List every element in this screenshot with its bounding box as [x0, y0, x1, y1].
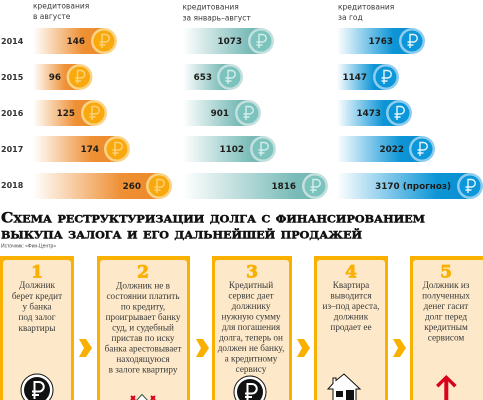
icon: rouble coin [234, 376, 266, 400]
icon: house [328, 374, 360, 400]
year labels: 2015 [1, 73, 24, 82]
panel: step 4: 4 [345, 262, 357, 282]
title [1, 210, 425, 242]
panel: step 1: квартиры [19, 323, 55, 333]
icon: red up arrow [436, 375, 457, 400]
panel: step 2: 2 [137, 262, 149, 282]
source note: Источник: «Фин-Центр» [1, 244, 56, 250]
panel: step 5: кредитным [424, 322, 468, 332]
bar: Jan-Aug 2015: 653 [194, 73, 212, 83]
bar: year 2017 [337, 136, 435, 162]
bar: year 2014: 1763 [369, 37, 393, 47]
bar: Jan-Aug 2014: 1073 [218, 37, 242, 47]
panel: step 1: под залог [19, 312, 56, 322]
panel: step 2: Должник не в [116, 280, 171, 290]
bar: year 2018 forecast: 3170 (прогноз) [375, 182, 451, 192]
arrow: step 2 to 3 [196, 339, 209, 357]
bar: year 2017: 2022 [380, 145, 404, 155]
column heading: yearly lending [338, 2, 394, 22]
panel: step 3: для погашения [222, 322, 281, 332]
panel: step 1: у банка [23, 302, 51, 312]
panel: step 5: полученных [422, 290, 470, 300]
bar: Jan-Aug 2016: 901 [211, 109, 229, 119]
bar: August 2014: 146 [67, 37, 85, 47]
panel: step 4: из–под ареста, [323, 301, 379, 311]
bar: August 2017: 174 [81, 145, 99, 155]
year labels: 2014 [1, 37, 24, 46]
panel: step 4: Квартира [333, 280, 369, 290]
column heading: January-August lending: за январь–август [182, 14, 251, 22]
bar: year 2015: 1147 [343, 73, 367, 83]
year labels: 2017 [1, 145, 23, 154]
column heading: January-August lending: кредитования [182, 2, 239, 12]
panel: step 5: денег гасит [424, 301, 468, 311]
title: выкупа залога и его дальнейшей продажей [1, 226, 362, 242]
bar: Jan-Aug 2017 [183, 136, 276, 162]
panel: step 5: Должник из [423, 280, 470, 290]
bar: year 2016: 1473 [357, 109, 381, 119]
panel: step 2: по кредиту, [121, 302, 165, 312]
panel: step 3: сервис дает [228, 290, 274, 300]
bar: Jan-Aug 2017: 1102 [220, 145, 244, 155]
year labels: 2018 [1, 181, 24, 190]
bar: year 2015 [337, 64, 399, 90]
panel: step 2: проигрывает банку [106, 312, 181, 322]
panel: step 3: а кредитному [225, 354, 278, 364]
bar: year 2014 [337, 28, 425, 54]
panel: step 2: в залоге квартиру [109, 364, 178, 374]
bar chart: yearly [337, 28, 483, 199]
panel: step 3: сервису [236, 364, 267, 374]
bar: Jan-Aug 2014 [183, 28, 274, 54]
bar: year 2016 [337, 100, 412, 126]
column heading: yearly lending: за год [338, 13, 363, 22]
title: Схема реструктуризации долга с финансированием [1, 210, 425, 226]
panel: step 1: берет кредит [12, 291, 62, 301]
bar: August 2014 [33, 28, 117, 54]
panel: step 4: продает ее [330, 322, 372, 332]
panel: step 5: сервисом [428, 332, 464, 342]
bar chart: August [33, 28, 172, 199]
panel: step 2: пристав по иску [111, 333, 175, 343]
panel: step 3: долга, теперь он [219, 332, 283, 342]
panel: step 5 [410, 256, 483, 400]
column heading: August lending [33, 2, 89, 21]
icon: arrested house [131, 394, 155, 400]
panel: step 3: Кредитный [229, 280, 273, 290]
bar: August 2018 [33, 173, 172, 199]
bar chart: January-August [183, 28, 328, 199]
bar: year 2018 forecast [337, 173, 483, 199]
bar: August 2015 [33, 64, 92, 90]
column heading: yearly lending: кредитования [338, 2, 394, 12]
panel: step 3: нужную сумму [221, 312, 281, 322]
bar: August 2016: 125 [57, 109, 75, 119]
bar: Jan-Aug 2015 [183, 64, 243, 90]
panel: step 2: суд, и судебный [112, 322, 174, 332]
panel: step 2: банка арестовывает [105, 344, 181, 354]
panel: step 1 [0, 256, 74, 400]
bar: August 2017 [33, 136, 130, 162]
bar: Jan-Aug 2018 [183, 173, 328, 199]
panel: step 1: 1 [31, 262, 43, 282]
arrow: step 1 to 2 [79, 339, 92, 357]
arrow: step 3 to 4 [297, 339, 310, 357]
bar: Jan-Aug 2018: 1816 [272, 182, 296, 192]
bar: August 2016 [33, 100, 107, 126]
panel: step 1: Должник [19, 280, 56, 290]
panel: step 5: 5 [440, 262, 452, 282]
panel: step 4: должник [334, 312, 369, 322]
column heading: August lending: в августе [33, 12, 71, 21]
year labels: 2016 [1, 109, 24, 118]
panel: step 3: 3 [246, 262, 258, 282]
bar: Jan-Aug 2016 [183, 100, 261, 126]
panel: step 3: должен не банку, [218, 343, 284, 353]
bar: August 2015: 96 [49, 73, 61, 83]
column heading: January-August lending [182, 2, 251, 22]
panel: step 4 [314, 256, 388, 400]
column heading: August lending: кредитования [33, 2, 89, 10]
arrow: step 4 to 5 [393, 339, 406, 357]
panel: step 2: состоянии платить [106, 291, 180, 301]
panel: step 3: должнику [232, 301, 271, 311]
icon: rouble coin [21, 374, 53, 400]
year labels [1, 37, 24, 190]
panel: step 3 [212, 256, 292, 400]
bar: August 2018: 260 [123, 182, 141, 192]
panel: step 2: находящуюся [116, 354, 170, 364]
panel: step 2 [97, 256, 190, 400]
panel: step 5: долг перед [425, 312, 467, 322]
panel: step 4: выводится [330, 290, 372, 300]
